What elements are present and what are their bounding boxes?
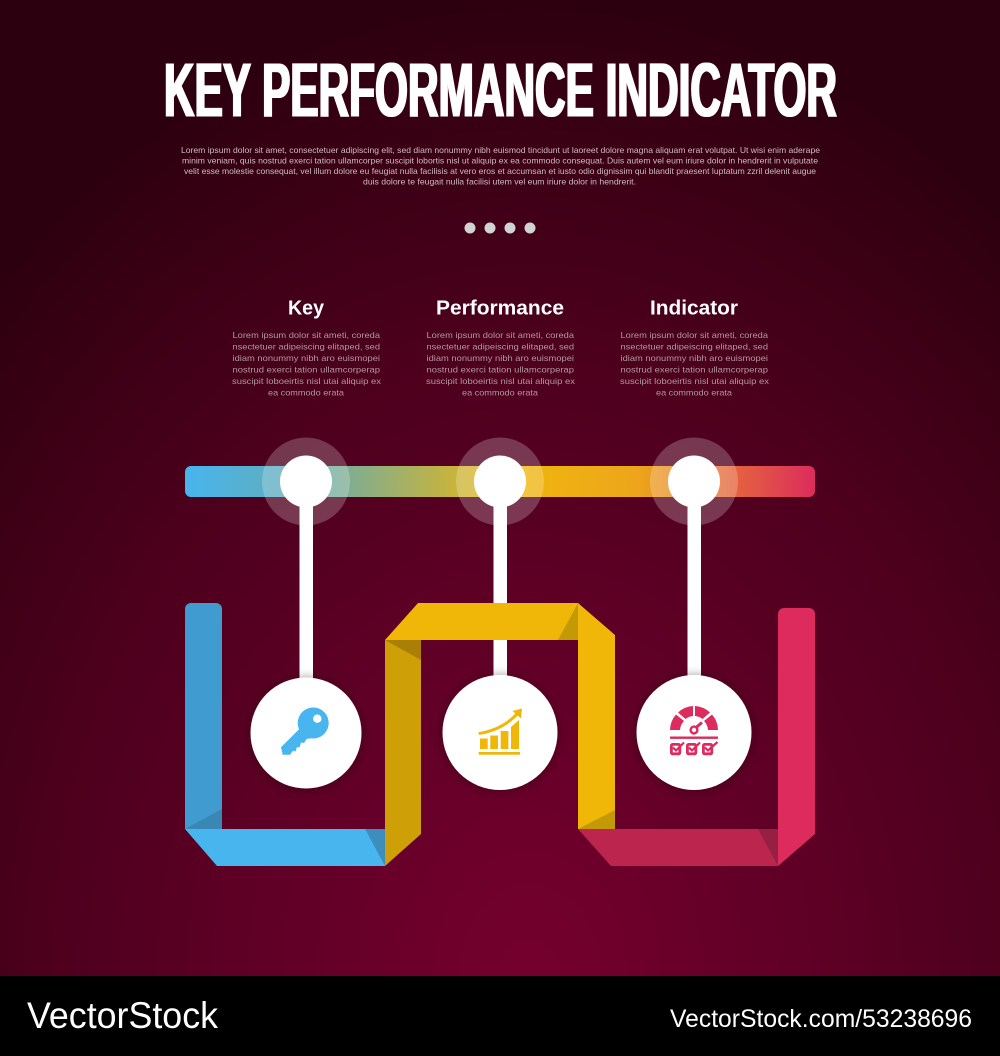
body text: Key: idiam nonummy nibh aro euismopei [232, 353, 380, 363]
body text: Indicator: nostrud exerci tation ullamcorperap [620, 364, 768, 374]
body text: Key: Lorem ipsum dolor sit ameti, coreda [232, 330, 380, 340]
body text: Performance: nostrud exerci tation ullamcorperap [426, 364, 574, 374]
body text: Key [232, 330, 382, 398]
node: Indicator [650, 438, 738, 526]
ribbon: crimson [578, 608, 815, 866]
node: Key [262, 438, 350, 526]
body text: Performance: nsectetuer adipeiscing elitaped, sed [426, 342, 574, 352]
body text: Key: suscipit loboeirtis nisl utai aliquip ex [232, 376, 382, 386]
body text: Key: ea commodo erata [268, 388, 344, 398]
column text: Key [232, 298, 382, 398]
heading: Performance: Performance [436, 298, 564, 320]
pagination dots [464, 222, 536, 234]
footer logo: VectorStock [27, 995, 218, 1036]
ribbon: yellow [385, 603, 615, 866]
icon: key [281, 708, 329, 755]
icon circle: chart [442, 675, 558, 790]
body text: Indicator: nsectetuer adipeiscing elitaped, sed [620, 342, 768, 352]
body text: Indicator [620, 330, 770, 398]
intro text block [181, 145, 820, 186]
intro text block: Lorem ipsum dolor sit amet, consectetuer adipiscing elit, sed diam nonummy nibh euismod tincidunt ut laoreet dolore magna aliquam erat volutpat. Ut wisi enim aderape [181, 145, 820, 155]
intro text block: velit esse molestie consequat, vel illum dolore eu feugiat nulla facilisis at vero eros et accumsan et iusto odio dignissim qui blandit praesent luptatum zzril delenit augue [184, 166, 816, 176]
column text: Performance [426, 298, 576, 398]
ribbon: blue [185, 603, 385, 866]
body text: Indicator: ea commodo erata [656, 388, 732, 398]
icon circle: gauge [636, 675, 752, 790]
body text: Indicator: suscipit loboeirtis nisl utai aliquip ex [620, 376, 770, 386]
body text: Performance: idiam nonummy nibh aro euismopei [426, 353, 574, 363]
body text: Performance: Lorem ipsum dolor sit ameti, coreda [426, 330, 574, 340]
intro text block: duis dolore te feugait nulla facilisi utem vel eum iriure dolor in hendrerit. [363, 176, 636, 186]
heading: Key: Key [288, 298, 325, 320]
body text: Indicator: Lorem ipsum dolor sit ameti, coreda [620, 330, 768, 340]
body text: Performance [426, 330, 576, 398]
footer image id: VectorStock.com/53238696 [670, 1005, 972, 1033]
gradient bar [185, 466, 815, 497]
node: Performance [456, 438, 544, 526]
icon: growth chart [479, 708, 522, 755]
heading: Indicator: Indicator [650, 298, 738, 320]
intro text block: minim veniam, quis nostrud exerci tation ullamcorper suscipit lobortis nisl ut aliquip ex ea commodo consequat. Duis autem vel eum iriure dolor in hendrerit in vulputate [182, 156, 818, 166]
icon circle: key [250, 678, 362, 788]
connector stems [300, 481, 701, 681]
body text: Key: nostrud exerci tation ullamcorperap [232, 364, 380, 374]
body text: Performance: suscipit loboeirtis nisl utai aliquip ex [426, 376, 576, 386]
icon: gauge with checklist [670, 706, 718, 754]
footer bar [0, 976, 1000, 1056]
body text: Key: nsectetuer adipeiscing elitaped, sed [232, 342, 380, 352]
body text: Indicator: idiam nonummy nibh aro euismopei [620, 353, 768, 363]
column text: Indicator [620, 298, 770, 398]
body text: Performance: ea commodo erata [462, 388, 538, 398]
